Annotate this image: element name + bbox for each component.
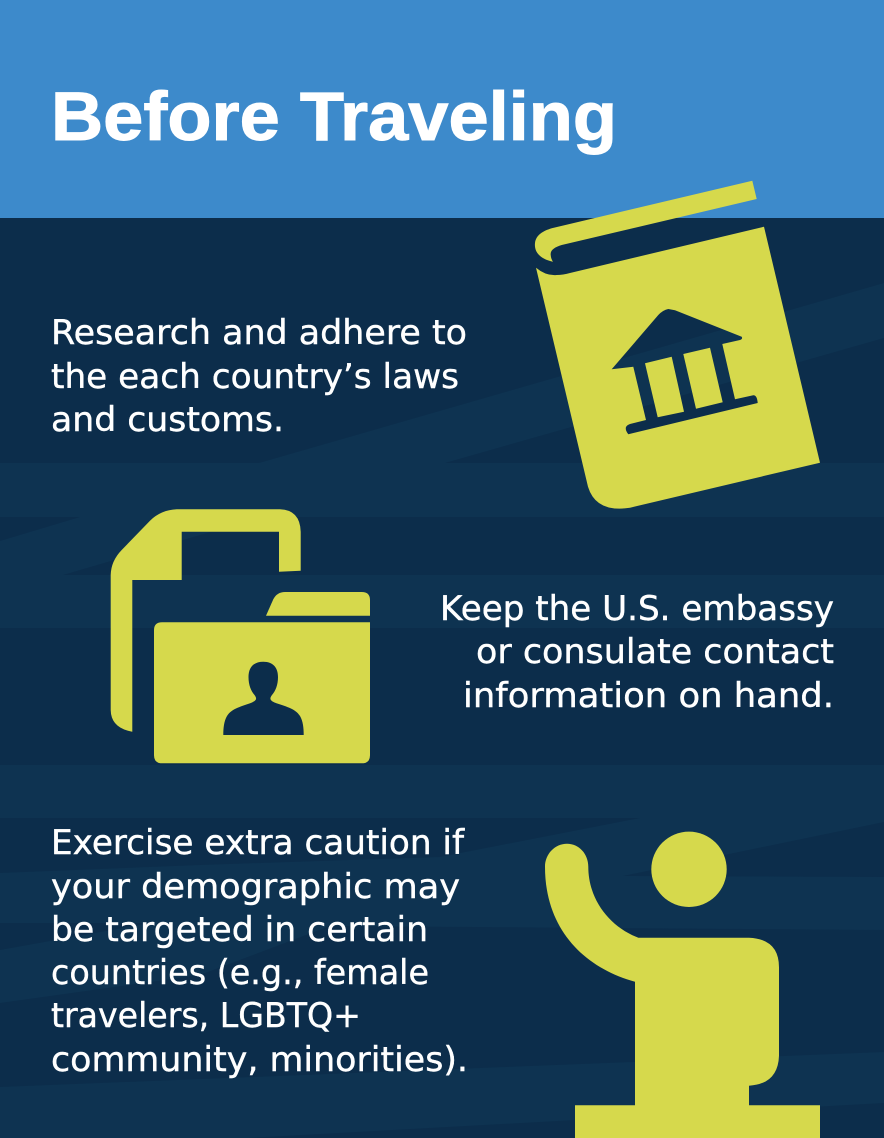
text: demographic caution: be targeted in certain [51, 910, 428, 950]
folder tab [266, 592, 370, 616]
text: demographic caution: travelers, LGBTQ+ [51, 996, 361, 1036]
text: demographic caution: Exercise extra caution if [51, 823, 465, 863]
text: embassy contact: or consulate contact [476, 632, 834, 672]
icon: person raising hand at podium [545, 832, 820, 1138]
text: research laws: the each country’s laws [51, 357, 459, 397]
document [111, 509, 301, 732]
book spine strip [535, 181, 757, 262]
text: research laws: Research and adhere to [51, 313, 467, 353]
text: research laws: and customs. [51, 400, 284, 440]
text: embassy contact [440, 589, 834, 716]
text: demographic caution: community, minorities). [51, 1040, 468, 1080]
text: research laws [51, 313, 467, 440]
text: embassy contact: Keep the U.S. embassy [440, 589, 834, 629]
icon: law book with courthouse [535, 181, 820, 509]
icon: document and contact folder [111, 509, 370, 763]
text: demographic caution [51, 823, 468, 1080]
head [651, 832, 727, 907]
title: Before Traveling [51, 78, 617, 155]
text: embassy contact: information on hand. [463, 676, 834, 716]
text: demographic caution: countries (e.g., female [51, 953, 429, 993]
body, arm and podium [545, 844, 820, 1138]
text: demographic caution: your demographic may [51, 867, 460, 907]
book cover with courthouse cut-out [536, 227, 820, 509]
folder body with person cut-out [154, 622, 370, 763]
header banner [0, 0, 884, 218]
